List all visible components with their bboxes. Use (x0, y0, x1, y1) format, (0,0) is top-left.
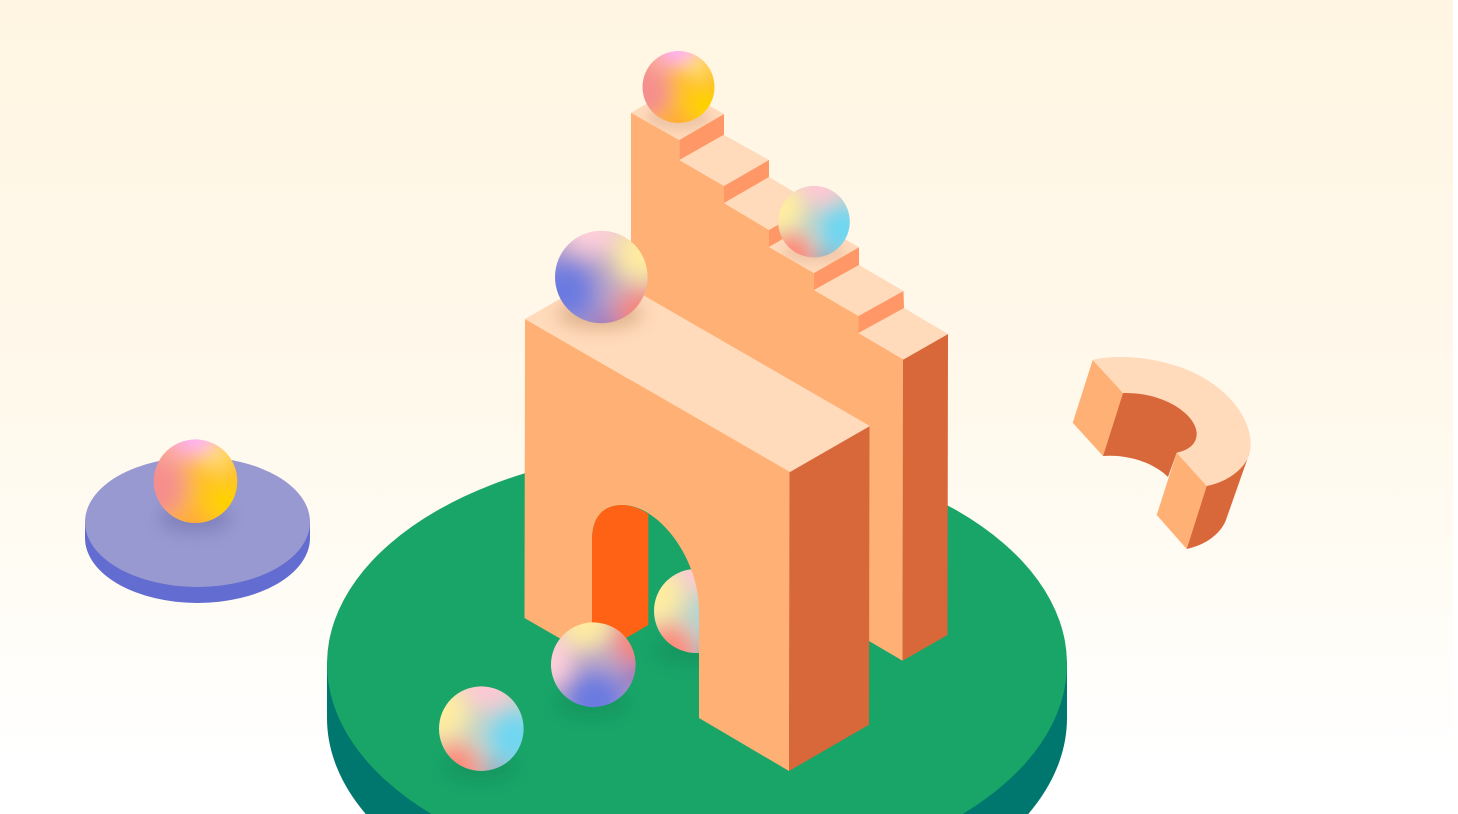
arch front face (524, 319, 790, 771)
stair risers (679, 114, 904, 333)
main arch (524, 273, 870, 771)
stair tower front face (631, 113, 904, 661)
sphere: blue ball on green disc (388, 636, 574, 814)
shadow: ball behind arch (654, 636, 726, 664)
sphere: blue ball on stairs (735, 143, 893, 300)
shadow: purple ball on arch top (558, 299, 642, 329)
small purple disc with yellow ball (85, 389, 310, 603)
shadow: top yellow ball (646, 111, 710, 132)
shadow: purple ball on green disc (556, 689, 628, 717)
arch right face (789, 426, 870, 771)
ring left end face (1073, 360, 1123, 456)
stair tower (631, 87, 948, 661)
arch inner wall (592, 505, 648, 658)
large green platform disc (327, 448, 1067, 814)
stair tops (631, 87, 948, 360)
floating broken ring (1073, 357, 1251, 549)
sphere: yellow ball on purple disc (104, 389, 287, 573)
shadow: yellow ball on purple disc (159, 503, 231, 533)
ring top face (1093, 357, 1251, 486)
stair tower right face (902, 334, 948, 661)
ring inner wall (1103, 393, 1197, 477)
sphere: purple ball on green disc (476, 547, 711, 782)
shadow: blue ball on stairs (784, 247, 844, 264)
sphere: top yellow ball (599, 8, 758, 166)
ring outer wall (1187, 453, 1250, 549)
ring front end face (1157, 453, 1207, 549)
shadow: blue ball on green disc (444, 753, 516, 781)
arch top face (525, 273, 870, 472)
sphere: purple ball on arch top (499, 175, 703, 379)
sphere: ball behind arch (604, 519, 788, 703)
